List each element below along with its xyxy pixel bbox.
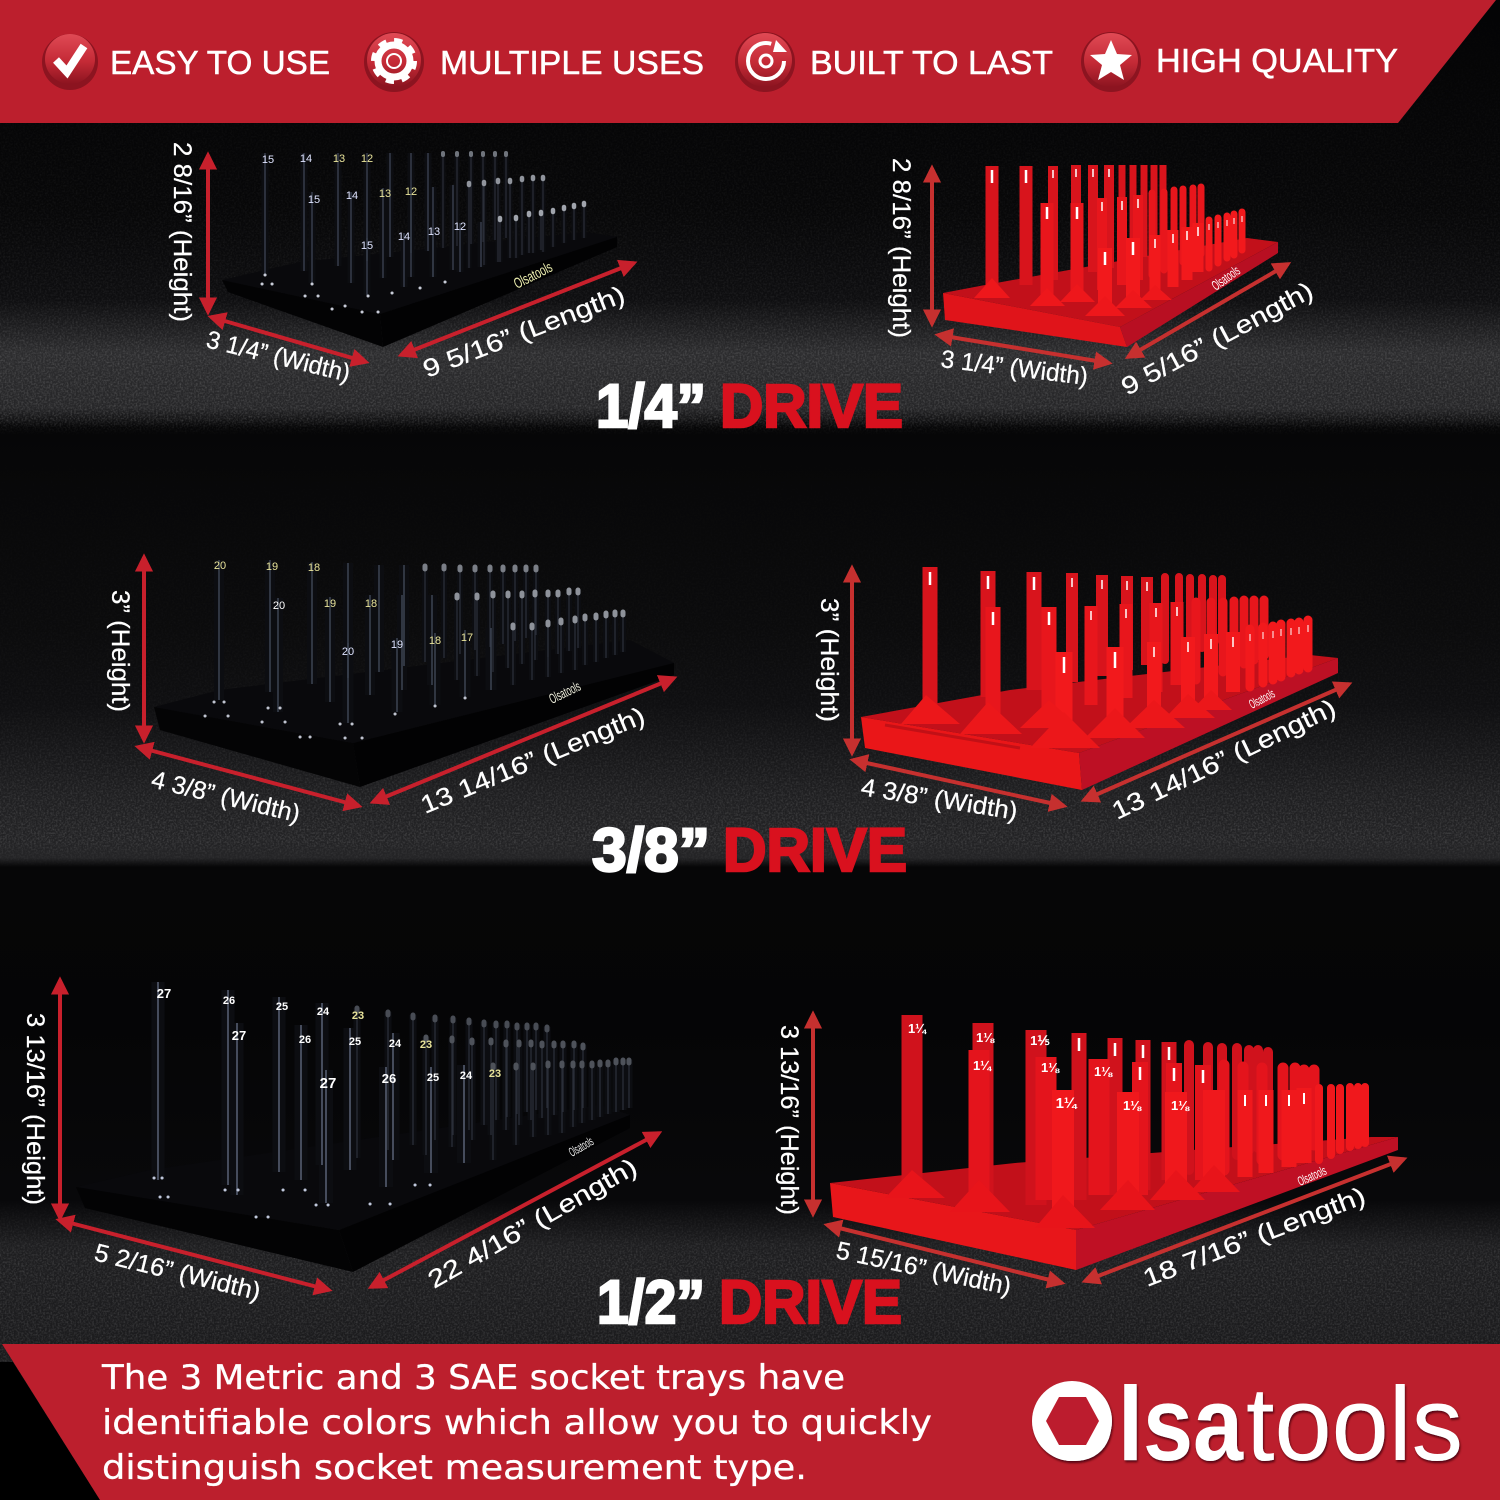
- size numbers on pegs: 17: [461, 632, 473, 644]
- size numbers on pegs: 27: [320, 1075, 336, 1092]
- height arrow: [811, 1014, 815, 1214]
- heading: 1/2 drive: 1/2”: [597, 1268, 705, 1336]
- width arrow: [59, 1220, 329, 1290]
- socket pegs: [901, 567, 1308, 748]
- height label: 3” (Height): [106, 590, 134, 712]
- dimensions: red 3/8 drive: [815, 568, 1349, 826]
- heading: 1/4 drive: DRIVE: [720, 372, 903, 440]
- length arrow: [1128, 264, 1288, 357]
- dimensions: black 1/2 drive: [21, 980, 659, 1306]
- tray base: [76, 1105, 630, 1272]
- width arrow: [938, 335, 1109, 363]
- tray logo: Olsatools: [511, 259, 555, 293]
- size numbers on pegs: 23: [420, 1039, 432, 1051]
- tray: red 1/4 drive: [943, 165, 1278, 347]
- size numbers on pegs: 24: [317, 1006, 330, 1018]
- size numbers on pegs: 14: [346, 190, 358, 202]
- length label: 9 5/16” (Length): [419, 281, 629, 384]
- size numbers on pegs: 24: [389, 1038, 402, 1050]
- size fractions on pegs: 1¼: [973, 1058, 992, 1073]
- height arrow: [206, 155, 210, 312]
- length label: 13 14/16” (Length): [417, 702, 649, 820]
- size numbers on pegs: 12: [454, 221, 466, 233]
- socket pegs: [154, 982, 629, 1217]
- heading: easy to use: EASY TO USE: [110, 45, 330, 82]
- height arrow: [58, 980, 62, 1218]
- size fractions on pegs: 1⅛: [976, 1030, 995, 1045]
- width label: 5 15/16” (Width): [834, 1236, 1014, 1301]
- length arrow: [1084, 684, 1349, 800]
- description text: The 3 Metric and 3 SAE socket trays have: [101, 1358, 845, 1398]
- dimensions: black 3/8 drive: [106, 557, 674, 828]
- description text: [101, 1358, 932, 1488]
- size numbers on pegs: 13: [333, 153, 345, 165]
- height label: 3 13/16” (Height): [21, 1013, 49, 1205]
- size numbers on pegs: 24: [460, 1070, 473, 1082]
- size numbers on pegs: 25: [349, 1036, 361, 1048]
- size fractions on pegs: 1⅛: [1041, 1060, 1060, 1075]
- icon: gear: [364, 32, 424, 92]
- size numbers on pegs: 12: [405, 186, 417, 198]
- width label: 3 1/4” (Width): [204, 326, 353, 388]
- size numbers on pegs: [157, 986, 501, 1092]
- size numbers on pegs: [214, 560, 473, 658]
- tray base: [861, 655, 1338, 790]
- width label: 5 2/16” (Width): [92, 1239, 263, 1306]
- tray: red 1/2 drive: [830, 1015, 1398, 1270]
- description text: distinguish socket measurement type.: [102, 1448, 807, 1488]
- logo: Olsatools: tools: [1246, 1366, 1463, 1483]
- length label: 13 14/16” (Length): [1107, 694, 1340, 825]
- width label: 3 1/4” (Width): [939, 345, 1090, 391]
- dimensions: black 1/4 drive: [168, 142, 634, 388]
- heading: 1/4 drive: 1/4”: [596, 372, 706, 440]
- height label: 3” (Height): [815, 598, 843, 722]
- size numbers on pegs: 20: [214, 560, 226, 572]
- width label: 4 3/8” (Width): [859, 773, 1019, 826]
- icon: check: [42, 34, 98, 90]
- tray logo: Olsatools: [546, 678, 583, 707]
- width arrow: [853, 760, 1064, 806]
- tray: red 3/8 drive: [861, 567, 1338, 790]
- size fractions on pegs: 1⅛: [1094, 1064, 1113, 1079]
- heading: high quality: HIGH QUALITY: [1156, 43, 1398, 80]
- size fractions on pegs: [908, 1021, 1190, 1113]
- socket pegs: [974, 165, 1242, 316]
- height label: 2 8/16” (Height): [887, 158, 915, 338]
- size numbers on pegs: 14: [398, 231, 410, 243]
- width label: 4 3/8” (Width): [149, 766, 303, 828]
- heading: 3/8 drive: [592, 816, 907, 884]
- bottom banner: [0, 1344, 1500, 1500]
- socket pegs: [205, 560, 623, 738]
- tray base: [154, 640, 674, 787]
- description text: identifiable colors which allow you to quickly: [102, 1403, 932, 1443]
- icon: cycle: [735, 32, 795, 92]
- size numbers on pegs: 26: [382, 1071, 396, 1086]
- size numbers on pegs: 23: [352, 1010, 364, 1022]
- tray: black 1/4 drive: [222, 153, 617, 347]
- size numbers on pegs: 18: [429, 635, 441, 647]
- height arrow: [850, 568, 854, 753]
- logo: Olsatools: [1032, 1362, 1463, 1483]
- dimensions: red 1/4 drive: [887, 158, 1318, 401]
- size numbers on pegs: [262, 153, 466, 252]
- socket pegs: [885, 1015, 1365, 1228]
- length arrow: [1085, 1159, 1404, 1281]
- length label: 22 4/16” (Length): [423, 1153, 642, 1294]
- length arrow: [373, 678, 674, 802]
- size numbers on pegs: 26: [299, 1034, 311, 1046]
- tray logo: Olsatools: [1295, 1163, 1329, 1189]
- size numbers on pegs: 18: [308, 562, 320, 574]
- height label: 3 13/16” (Height): [775, 1025, 803, 1215]
- length arrow: [371, 1133, 659, 1287]
- size fractions on pegs: 1¼: [1056, 1095, 1078, 1112]
- heading: built to last: BUILT TO LAST: [810, 45, 1053, 82]
- socket pegs: [262, 153, 584, 312]
- length arrow: [401, 263, 634, 355]
- size numbers on pegs: 13: [379, 188, 391, 200]
- length label: 18 7/16” (Length): [1139, 1182, 1369, 1293]
- length label: 9 5/16” (Length): [1117, 277, 1318, 401]
- size numbers on pegs: 20: [273, 600, 285, 612]
- width arrow: [138, 747, 359, 806]
- height arrow: [142, 557, 146, 740]
- size fractions on pegs: 1⅛: [1171, 1098, 1190, 1113]
- size numbers on pegs: 27: [157, 986, 171, 1001]
- heading: multiple uses: MULTIPLE USES: [440, 45, 704, 82]
- height arrow: [930, 168, 934, 324]
- size numbers on pegs: 23: [489, 1068, 501, 1080]
- heading: 1/2 drive: [597, 1268, 902, 1336]
- size numbers on pegs: 19: [266, 561, 278, 573]
- size numbers on pegs: 15: [361, 240, 373, 252]
- size fractions on pegs: 1¼: [908, 1021, 927, 1036]
- size numbers on pegs: 12: [361, 153, 373, 165]
- tray base: [943, 238, 1278, 347]
- dimensions: red 1/2 drive: [775, 1014, 1404, 1301]
- top banner: [0, 0, 1496, 123]
- size numbers on pegs: 27: [232, 1028, 246, 1043]
- size numbers on pegs: 14: [300, 153, 312, 165]
- tray: black 3/8 drive: [154, 560, 674, 787]
- heading: 1/2 drive: DRIVE: [719, 1268, 902, 1336]
- size numbers on pegs: 20: [342, 646, 354, 658]
- heading: 3/8 drive: DRIVE: [723, 816, 907, 884]
- heading: 3/8 drive: 3/8”: [592, 816, 710, 884]
- size numbers on pegs: 19: [324, 598, 336, 610]
- logo: Olsatools: lsa: [1118, 1366, 1244, 1483]
- width arrow: [211, 317, 366, 362]
- size fractions on pegs: 1⅕: [1030, 1033, 1050, 1048]
- size numbers on pegs: 15: [308, 194, 320, 206]
- tray logo: Olsatools: [566, 1133, 596, 1160]
- logo: Olsatools: O: [1032, 1362, 1116, 1483]
- tray base: [830, 1137, 1398, 1270]
- width arrow: [827, 1225, 1062, 1283]
- size fractions on pegs: 1⅛: [1123, 1098, 1142, 1113]
- size numbers on pegs: 25: [427, 1072, 439, 1084]
- tray: black 1/2 drive: [76, 982, 630, 1272]
- size numbers on pegs: 19: [391, 639, 403, 651]
- tray logo: Olsatools: [1246, 686, 1277, 712]
- icon: star: [1081, 32, 1141, 92]
- size numbers on pegs: 18: [365, 598, 377, 610]
- height label: 2 8/16” (Height): [168, 142, 196, 322]
- size numbers on pegs: 15: [262, 154, 274, 166]
- tray logo: Olsatools: [1208, 262, 1243, 293]
- size numbers on pegs: 13: [428, 226, 440, 238]
- size numbers on pegs: 26: [223, 995, 235, 1007]
- size numbers on pegs: 25: [276, 1001, 288, 1013]
- tray base: [222, 232, 617, 347]
- heading: 1/4 drive: [596, 372, 903, 440]
